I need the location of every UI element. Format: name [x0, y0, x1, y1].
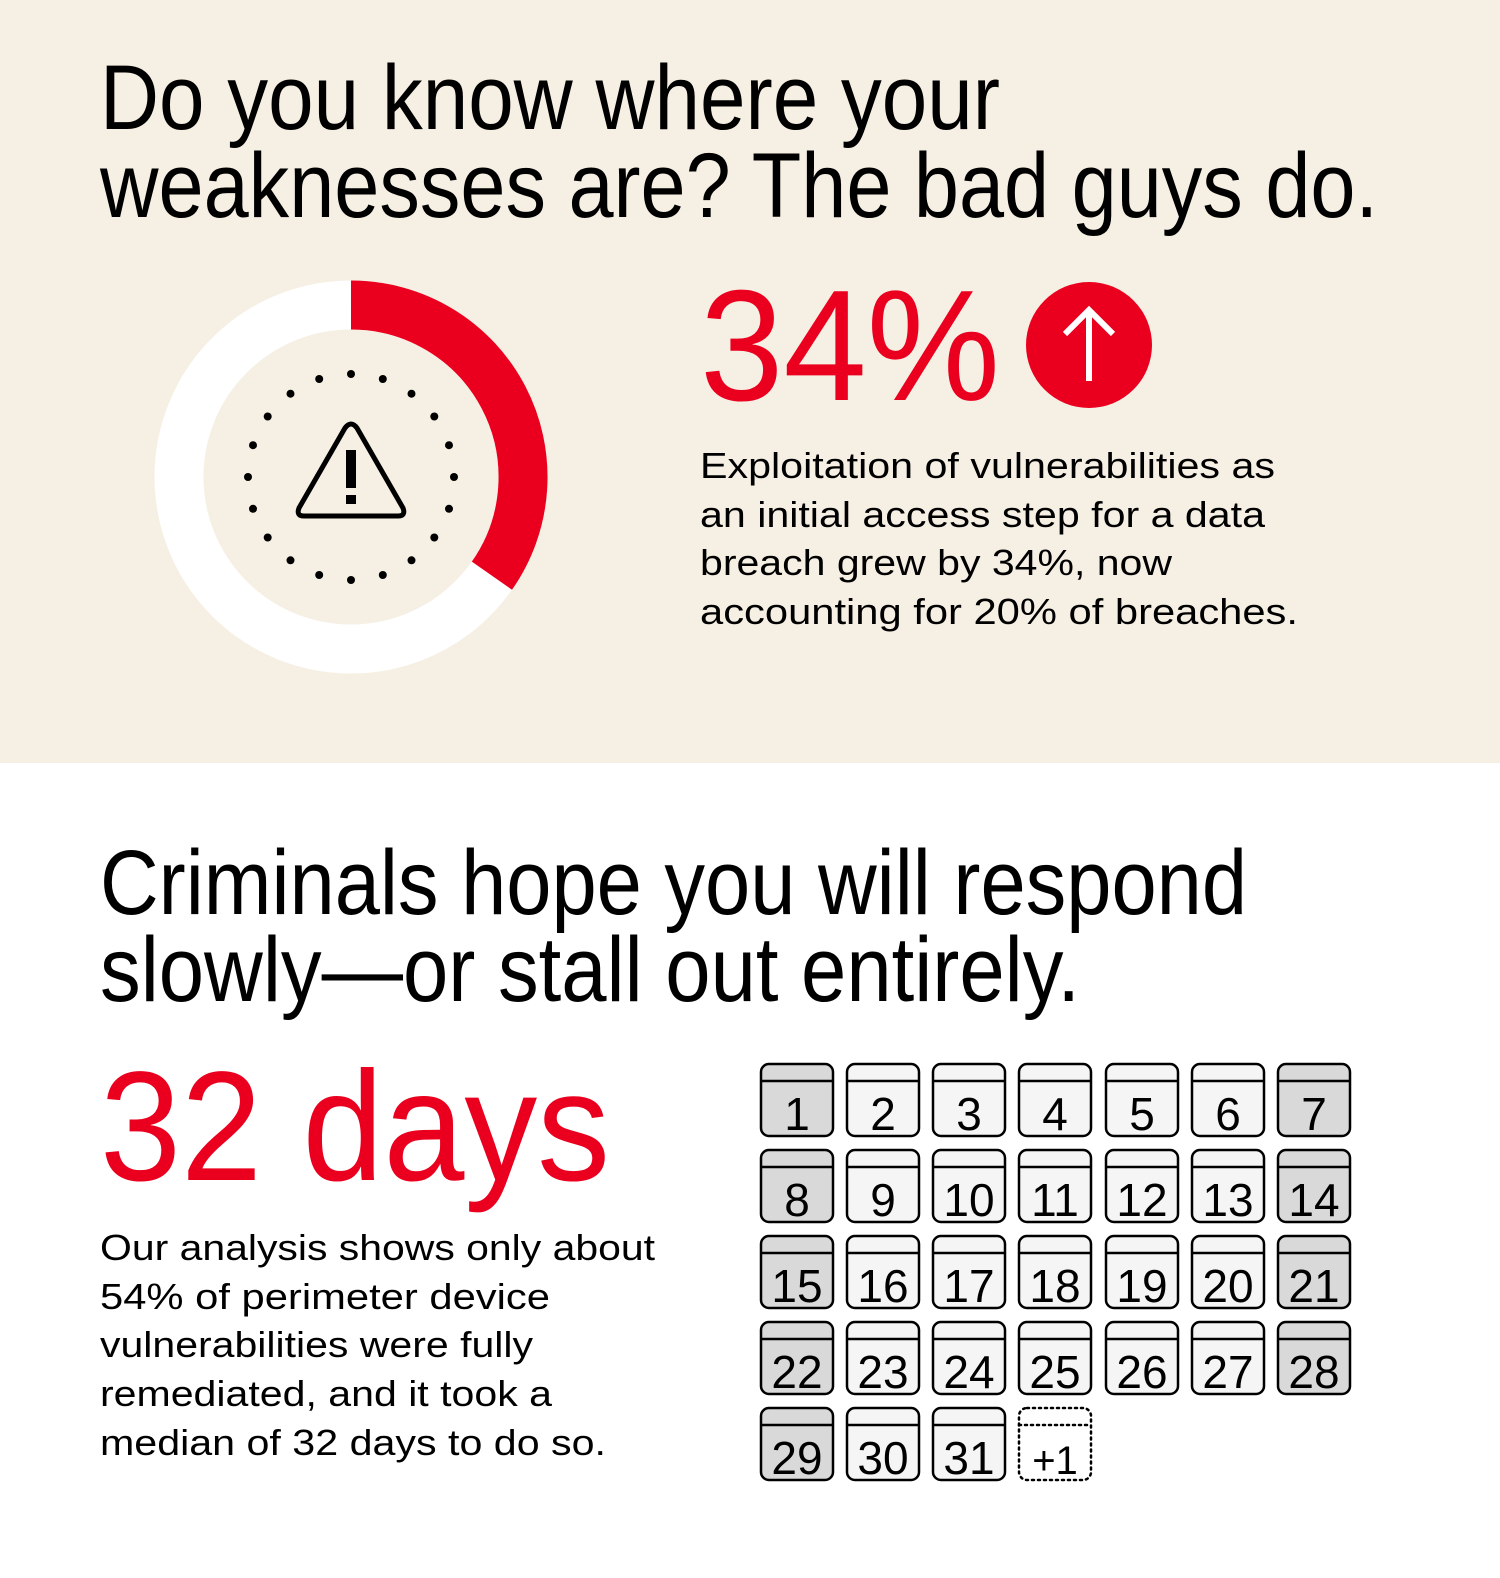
calendar grid: 30 [857, 1432, 909, 1484]
title: weaknesses: Do you know where your [100, 47, 1000, 149]
text block: analysis [100, 1227, 655, 1463]
calendar grid: 14 [1288, 1174, 1340, 1226]
calendar grid: 4 [1042, 1088, 1068, 1140]
calendar grid: 10 [943, 1174, 995, 1226]
text block: analysis: Our analysis shows only about [100, 1227, 655, 1268]
calendar grid: 31 [943, 1432, 995, 1484]
icon: up arrow circle [1026, 282, 1152, 408]
calendar grid: 2 [870, 1088, 896, 1140]
calendar grid: 8 [784, 1174, 810, 1226]
calendar grid: +1 [1032, 1439, 1078, 1483]
text block: analysis: 54% of perimeter device [100, 1276, 550, 1317]
calendar grid [761, 1064, 1350, 1484]
calendar grid: 15 [771, 1260, 823, 1312]
panel: top section background [0, 0, 1500, 763]
calendar grid: 9 [870, 1174, 896, 1226]
text block: exploitation description: an initial access step for a data [700, 494, 1266, 535]
text block: exploitation description: accounting for 20% of breaches. [700, 591, 1298, 632]
calendar grid: 21 [1288, 1260, 1340, 1312]
calendar grid: 22 [771, 1346, 823, 1398]
title: weaknesses [99, 47, 1378, 237]
icon: dotted ring [244, 370, 458, 584]
calendar grid: 1 [784, 1088, 810, 1140]
calendar grid: 16 [857, 1260, 909, 1312]
text block: exploitation description [700, 445, 1298, 632]
calendar grid: 13 [1202, 1174, 1254, 1226]
calendar grid: 3 [956, 1088, 982, 1140]
stat: 34%: 34% [700, 258, 1000, 434]
calendar grid: 11 [1031, 1174, 1079, 1226]
title: respond slowly: Criminals hope you will respond [100, 832, 1247, 934]
icon: warning triangle [298, 424, 404, 516]
donut chart: 34% [179, 305, 523, 649]
title: respond slowly [100, 832, 1247, 1021]
title: respond slowly: slowly—or stall out entirely. [100, 919, 1080, 1021]
calendar grid: 12 [1116, 1174, 1168, 1226]
calendar grid: 26 [1116, 1346, 1168, 1398]
calendar grid: 17 [943, 1260, 995, 1312]
text block: analysis: median of 32 days to do so. [100, 1422, 606, 1463]
calendar grid: 6 [1215, 1088, 1241, 1140]
calendar grid: 23 [857, 1346, 909, 1398]
stat: 32 days: 32 days [100, 1040, 610, 1214]
calendar grid: 19 [1116, 1260, 1168, 1312]
calendar grid: 5 [1129, 1088, 1155, 1140]
text block: exploitation description: breach grew by 34%, now [700, 542, 1173, 583]
text block: exploitation description: Exploitation of vulnerabilities as [700, 445, 1275, 486]
calendar grid: 20 [1202, 1260, 1254, 1312]
text block: analysis: vulnerabilities were fully [100, 1324, 533, 1365]
calendar grid: 27 [1202, 1346, 1254, 1398]
calendar grid: 24 [943, 1346, 995, 1398]
calendar grid: 29 [771, 1432, 823, 1484]
text block: analysis: remediated, and it took a [100, 1373, 553, 1414]
calendar grid: 18 [1029, 1260, 1081, 1312]
calendar grid: 28 [1288, 1346, 1340, 1398]
calendar grid: 25 [1029, 1346, 1081, 1398]
calendar grid: 7 [1301, 1088, 1327, 1140]
